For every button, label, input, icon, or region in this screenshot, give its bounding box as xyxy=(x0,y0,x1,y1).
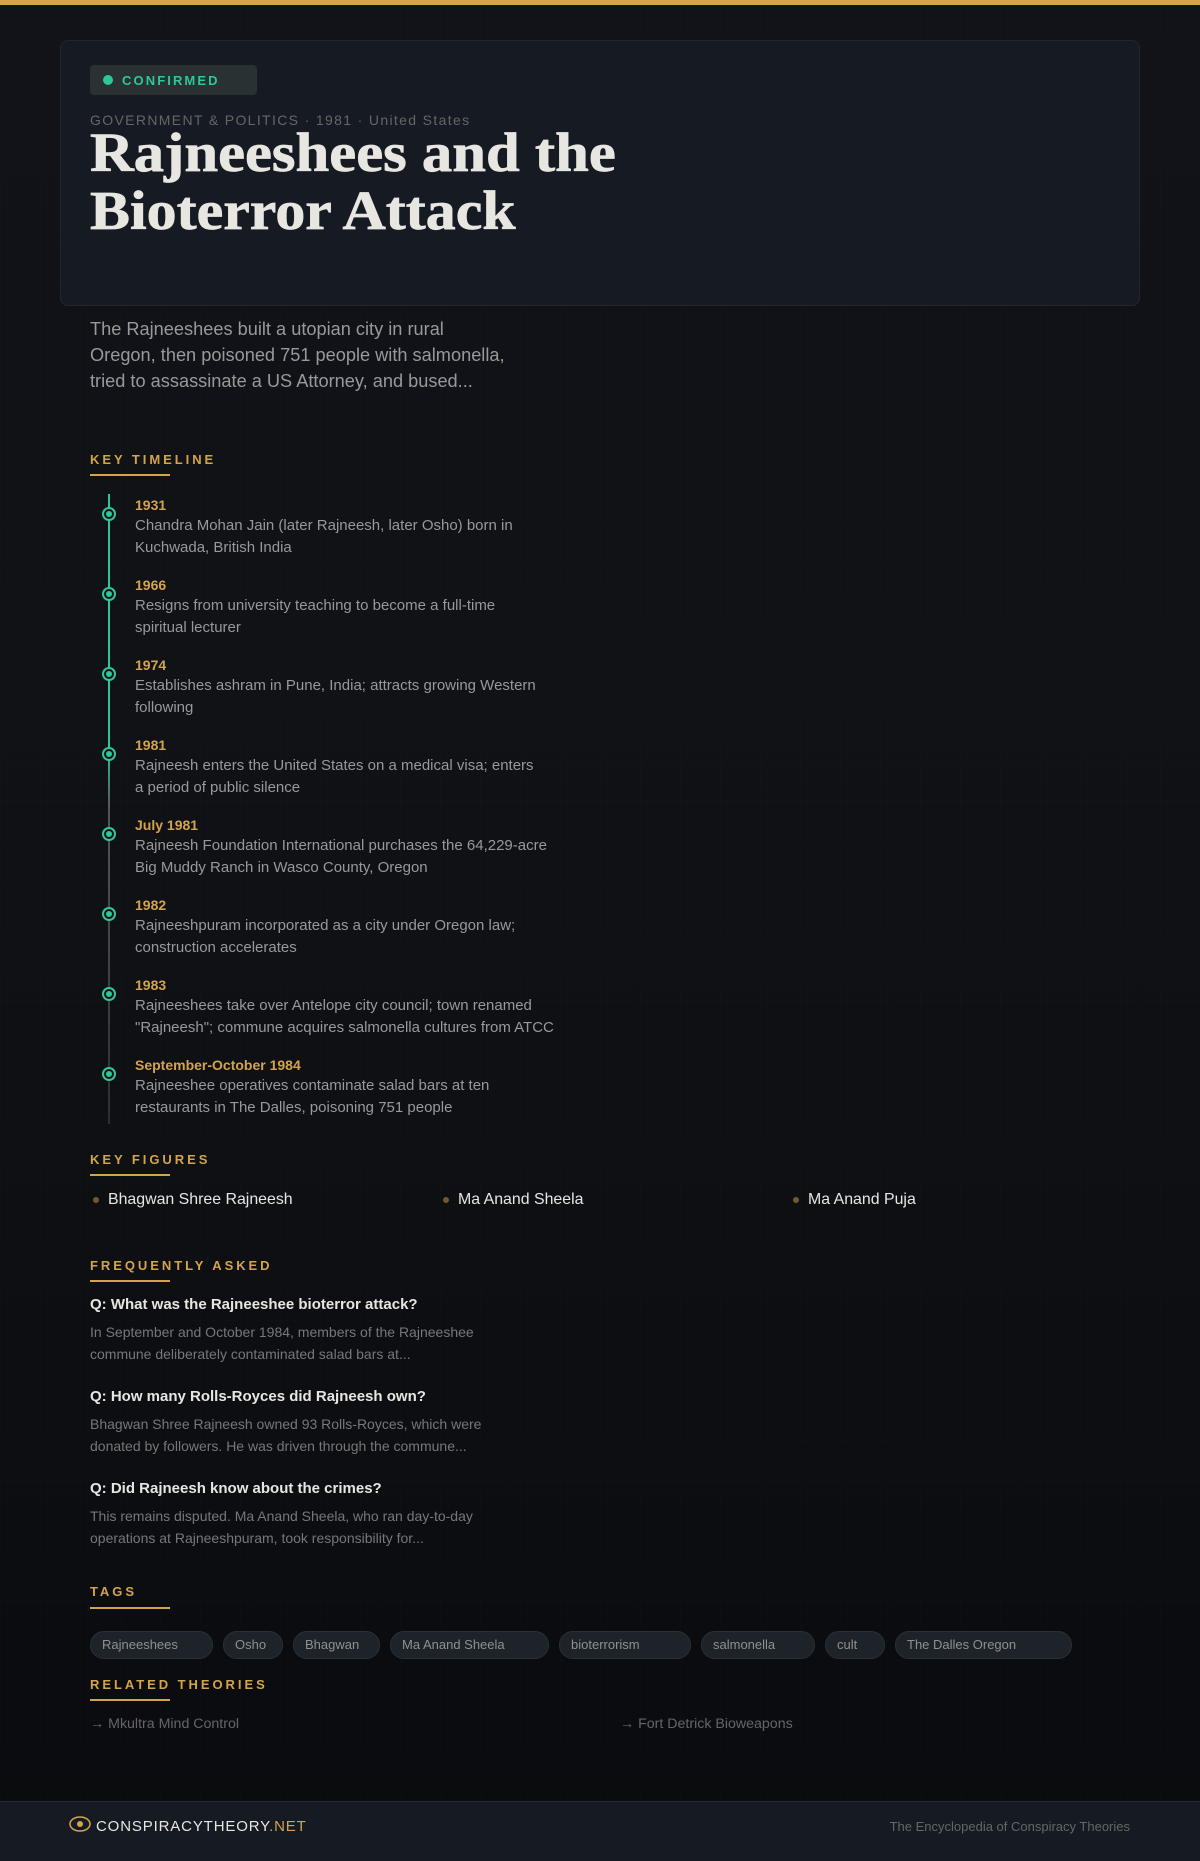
faq 1: In September and October 1984, members of the Rajneeshee xyxy=(90,1324,474,1340)
icon: eye xyxy=(69,1816,91,1832)
top accent bar xyxy=(0,0,1200,5)
badge: confirmed xyxy=(90,65,257,95)
event September-October 1984: restaurants in The Dalles, poisoning 751 people xyxy=(135,1099,452,1116)
intro text: tried to assassinate a US Attorney, and bused... xyxy=(90,371,473,391)
faq 2 xyxy=(90,1388,481,1454)
heading: related theories: RELATED THEORIES xyxy=(90,1677,268,1692)
intro text: The Rajneeshees built a utopian city in rural xyxy=(90,319,444,339)
event 1974: following xyxy=(135,699,193,716)
event 1974: Establishes ashram in Pune, India; attracts growing Western xyxy=(135,677,536,694)
intro text: Oregon, then poisoned 751 people with salmonella, xyxy=(90,345,505,365)
event 1983: Rajneeshees take over Antelope city council; town renamed xyxy=(135,997,532,1014)
event 1931: Chandra Mohan Jain (later Rajneesh, later Osho) born in xyxy=(135,517,513,534)
tag list xyxy=(90,1631,1072,1659)
panel: header card xyxy=(60,40,1140,306)
logo text: CONSPIRACYTHEORY.NET xyxy=(96,1818,307,1835)
heading: key timeline: KEY TIMELINE xyxy=(90,452,216,467)
faq 2: Q: How many Rolls-Royces did Rajneesh own? xyxy=(90,1388,426,1405)
title: Rajneeshees and the xyxy=(90,122,616,183)
event 1982 xyxy=(102,897,515,956)
event July 1981: Big Muddy Ranch in Wasco County, Oregon xyxy=(135,859,428,876)
event July 1981 xyxy=(102,817,547,876)
event 1931: 1931 xyxy=(135,497,166,513)
footer tagline: The Encyclopedia of Conspiracy Theories xyxy=(890,1819,1130,1834)
event 1983 xyxy=(102,977,554,1036)
event 1974: 1974 xyxy=(135,657,166,673)
heading: tags: TAGS xyxy=(90,1584,137,1599)
event 1966: spiritual lecturer xyxy=(135,619,241,636)
timeline spine xyxy=(108,494,110,1124)
event 1982: 1982 xyxy=(135,897,166,913)
faq 3: Q: Did Rajneesh know about the crimes? xyxy=(90,1480,382,1497)
related link: Mkultra: → Mkultra Mind Control xyxy=(90,1716,239,1732)
figure: Ma Anand Puja: Ma Anand Puja xyxy=(808,1191,916,1208)
event 1966 xyxy=(102,577,495,636)
intro text xyxy=(90,319,505,391)
tag list: bioterrorism xyxy=(571,1637,640,1652)
timeline xyxy=(102,494,554,1124)
event 1982: Rajneeshpuram incorporated as a city under Oregon law; xyxy=(135,917,515,934)
category and date line: GOVERNMENT & POLITICS · 1981 · United States xyxy=(90,112,470,128)
event 1981: a period of public silence xyxy=(135,779,300,796)
tag list: The Dalles Oregon xyxy=(907,1637,1016,1652)
badge: confirmed: CONFIRMED xyxy=(122,73,220,88)
faq 1: Q: What was the Rajneeshee bioterror attack? xyxy=(90,1296,418,1313)
faq 2: donated by followers. He was driven through the commune... xyxy=(90,1438,467,1454)
event September-October 1984: Rajneeshee operatives contaminate salad bars at ten xyxy=(135,1077,489,1094)
title: Bioterror Attack xyxy=(90,180,516,241)
event 1931 xyxy=(102,497,513,556)
figure: Ma Anand Sheela: Ma Anand Sheela xyxy=(458,1191,583,1208)
faq 1: commune deliberately contaminated salad bars at... xyxy=(90,1346,411,1362)
figure: Bhagwan Shree Rajneesh: Bhagwan Shree Rajneesh xyxy=(108,1191,293,1208)
heading: key figures: KEY FIGURES xyxy=(90,1152,210,1167)
tag list: Bhagwan xyxy=(305,1637,359,1652)
tag list: salmonella xyxy=(713,1637,775,1652)
event September-October 1984 xyxy=(102,1057,489,1116)
event July 1981: July 1981 xyxy=(135,817,198,833)
event 1982: construction accelerates xyxy=(135,939,297,956)
faq 3: operations at Rajneeshpuram, took responsibility for... xyxy=(90,1530,424,1546)
related link: Fort Detrick: → Fort Detrick Bioweapons xyxy=(620,1716,793,1732)
event 1983: "Rajneesh"; commune acquires salmonella cultures from ATCC xyxy=(135,1019,554,1036)
title xyxy=(90,122,616,241)
event 1981 xyxy=(102,737,534,796)
tag list: Osho xyxy=(235,1637,266,1652)
faq 2: Bhagwan Shree Rajneesh owned 93 Rolls-Royces, which were xyxy=(90,1416,481,1432)
event 1981: 1981 xyxy=(135,737,166,753)
event 1966: 1966 xyxy=(135,577,166,593)
event 1931: Kuchwada, British India xyxy=(135,539,292,556)
tag list: Rajneeshees xyxy=(102,1637,178,1652)
faq 3 xyxy=(90,1480,473,1546)
faq 3: This remains disputed. Ma Anand Sheela, who ran day-to-day xyxy=(90,1508,473,1524)
footer xyxy=(0,1801,1200,1861)
event 1981: Rajneesh enters the United States on a medical visa; enters xyxy=(135,757,534,774)
event 1966: Resigns from university teaching to become a full-time xyxy=(135,597,495,614)
event 1974 xyxy=(102,657,536,716)
event July 1981: Rajneesh Foundation International purchases the 64,229-acre xyxy=(135,837,547,854)
event 1983: 1983 xyxy=(135,977,166,993)
tag list: cult xyxy=(837,1637,857,1652)
event September-October 1984: September-October 1984 xyxy=(135,1057,301,1073)
faq 1 xyxy=(90,1296,474,1362)
tag list: Ma Anand Sheela xyxy=(402,1637,505,1652)
heading: frequently asked: FREQUENTLY ASKED xyxy=(90,1258,273,1273)
